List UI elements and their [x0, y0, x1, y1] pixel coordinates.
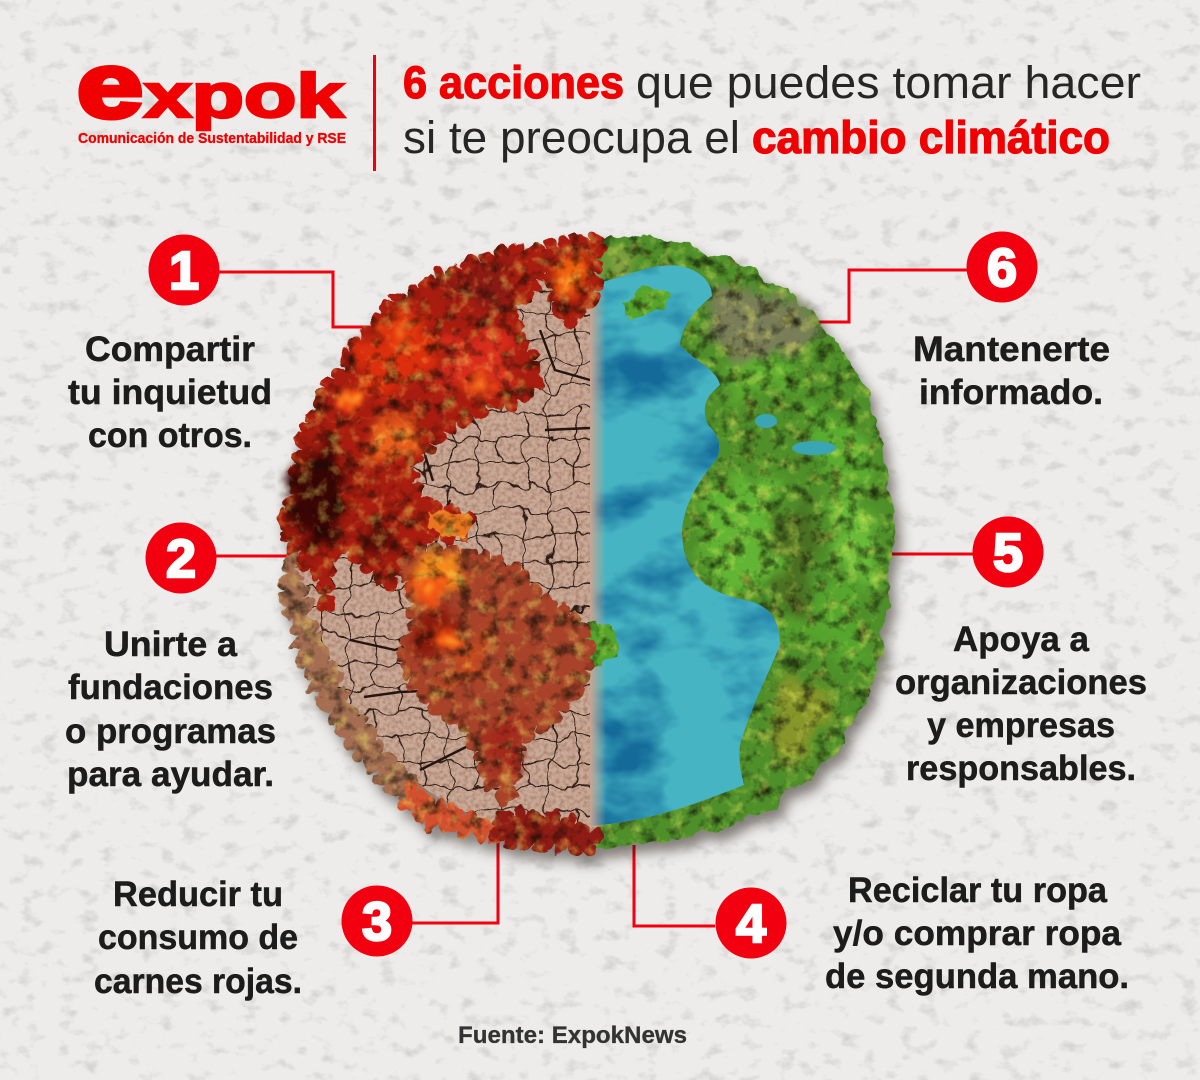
- connector lines: [215, 270, 975, 926]
- text 5: y empresas: [927, 706, 1115, 745]
- badge 2: 2: [166, 529, 196, 589]
- badge 6: 6: [987, 238, 1017, 298]
- text 5: responsables.: [906, 749, 1136, 788]
- seam between earth and ocean: [590, 262, 606, 827]
- logo wordmark: xpok: [144, 62, 345, 131]
- lakes: [755, 414, 836, 455]
- logo tagline: Comunicación de Sustentabilidad y RSE: [78, 131, 346, 147]
- globe: [260, 220, 891, 860]
- step 4: [716, 871, 1129, 996]
- badge 6: [966, 232, 1038, 302]
- step 2: [65, 522, 276, 794]
- badge 3: 3: [362, 892, 392, 952]
- burning rim: [284, 560, 598, 850]
- text 5: organizaciones: [895, 663, 1147, 702]
- text 4: [825, 871, 1129, 996]
- text 4: Reciclar tu ropa: [848, 871, 1108, 910]
- text 1: tu inquietud: [68, 373, 272, 412]
- text 2: o programas: [65, 712, 276, 751]
- forest land half: [594, 234, 910, 866]
- text 5: Apoya a: [953, 620, 1090, 659]
- text 3: carnes rojas.: [94, 962, 302, 1001]
- step 6: [913, 232, 1110, 412]
- text 4: y/o comprar ropa: [833, 914, 1122, 953]
- text 5: [895, 620, 1147, 788]
- cracked earth half: [295, 240, 597, 844]
- text 3: consumo de: [98, 918, 298, 957]
- text 1: [68, 330, 272, 455]
- badge 5: 5: [993, 523, 1023, 583]
- badge 1: 1: [169, 241, 199, 301]
- header divider: [373, 55, 376, 171]
- logo wordmark: e: [77, 35, 143, 137]
- badge 3: [342, 886, 412, 956]
- badge 5: [972, 516, 1044, 588]
- badge 2: [146, 522, 216, 594]
- title: cambio climático: [752, 112, 1110, 163]
- title: que puedes tomar hacer: [636, 57, 1141, 108]
- step 1: [68, 234, 272, 455]
- title: si te preocupa el: [403, 112, 740, 163]
- logo wordmark: [77, 35, 345, 137]
- source: Fuente: ExpokNews: [458, 1022, 687, 1049]
- text 4: de segunda mano.: [825, 957, 1129, 996]
- ocean: [590, 265, 780, 826]
- small burning island: [428, 512, 470, 536]
- text 2: para ayudar.: [67, 755, 274, 794]
- text 1: con otros.: [88, 416, 252, 455]
- text 3: [94, 875, 302, 1001]
- fire glow: [337, 310, 498, 653]
- text 2: Unirte a: [104, 625, 238, 664]
- fire colour patches south: [410, 556, 525, 780]
- fire colour patches: [292, 252, 590, 560]
- title: 6 acciones: [403, 57, 624, 108]
- text 6: Mantenerte: [913, 330, 1110, 369]
- step 5: [895, 516, 1147, 788]
- islands: [590, 291, 668, 662]
- text 2: fundaciones: [68, 668, 273, 707]
- badge 4: [716, 888, 786, 958]
- badge 1: [148, 234, 220, 306]
- step 3: [94, 875, 412, 1001]
- text 6: [913, 330, 1110, 412]
- text 1: Compartir: [85, 330, 255, 369]
- burning south america: [402, 551, 590, 800]
- forest colour patches: [605, 250, 875, 760]
- title: [403, 57, 1141, 163]
- text 2: [65, 625, 276, 794]
- header: logo: [77, 35, 346, 147]
- text 6: informado.: [919, 373, 1103, 412]
- text 3: Reducir tu: [113, 875, 283, 914]
- burning north america: [283, 238, 596, 610]
- badge 4: 4: [736, 894, 766, 954]
